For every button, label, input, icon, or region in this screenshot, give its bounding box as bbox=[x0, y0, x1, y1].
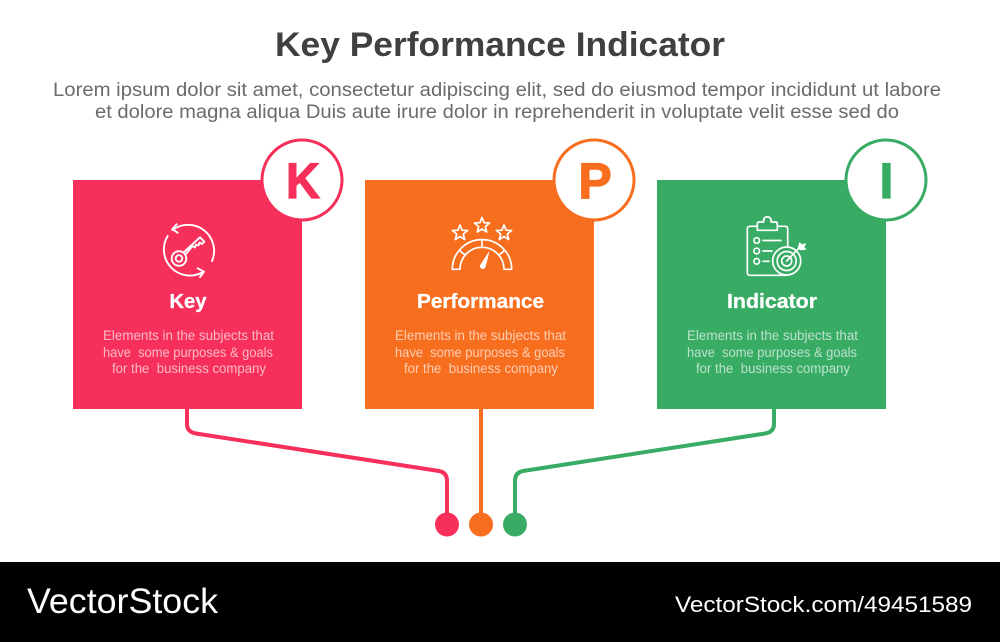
badge: P: P bbox=[578, 153, 612, 209]
badge: I: I bbox=[880, 153, 893, 209]
badge: I bbox=[846, 140, 926, 220]
icon: key with cycle arrows bbox=[164, 224, 214, 277]
connector: key bbox=[187, 408, 459, 536]
description bbox=[687, 328, 858, 376]
footer logo text: VectorStock bbox=[27, 582, 219, 621]
card background bbox=[657, 180, 886, 409]
badge: K: K bbox=[286, 153, 320, 209]
description: for the business company bbox=[404, 361, 558, 376]
icon: clipboard with target bbox=[747, 217, 806, 275]
panel: indicator bbox=[657, 140, 926, 409]
badge: P bbox=[554, 140, 634, 220]
panel: key bbox=[73, 140, 342, 409]
description: Elements in the subjects that bbox=[687, 328, 858, 343]
description: for the business company bbox=[696, 361, 850, 376]
description: have some purposes & goals bbox=[687, 345, 857, 360]
badge: K bbox=[262, 140, 342, 220]
footer image id: VectorStock.com/49451589 bbox=[675, 592, 972, 617]
heading: Key: Key bbox=[170, 291, 207, 313]
description: have some purposes & goals bbox=[103, 345, 273, 360]
heading: Indicator: Indicator bbox=[727, 291, 817, 313]
intro paragraph bbox=[53, 80, 941, 123]
icon: gauge with stars bbox=[452, 218, 512, 269]
intro paragraph: Lorem ipsum dolor sit amet, consectetur adipiscing elit, sed do eiusmod tempor incididunt ut labore bbox=[53, 80, 941, 101]
connector: indicator bbox=[503, 408, 774, 536]
description bbox=[103, 328, 274, 376]
heading: Performance: Performance bbox=[417, 291, 544, 313]
title: Key Performance Indicator bbox=[275, 26, 725, 64]
card background bbox=[365, 180, 594, 409]
description bbox=[395, 328, 566, 376]
intro paragraph: et dolore magna aliqua Duis aute irure dolor in reprehenderit in voluptate velit esse sed do bbox=[95, 102, 899, 123]
description: Elements in the subjects that bbox=[103, 328, 274, 343]
card background bbox=[73, 180, 302, 409]
description: for the business company bbox=[112, 361, 266, 376]
panel: performance bbox=[365, 140, 634, 409]
description: have some purposes & goals bbox=[395, 345, 565, 360]
connector: performance bbox=[469, 408, 493, 536]
footer band bbox=[0, 562, 1000, 642]
description: Elements in the subjects that bbox=[395, 328, 566, 343]
